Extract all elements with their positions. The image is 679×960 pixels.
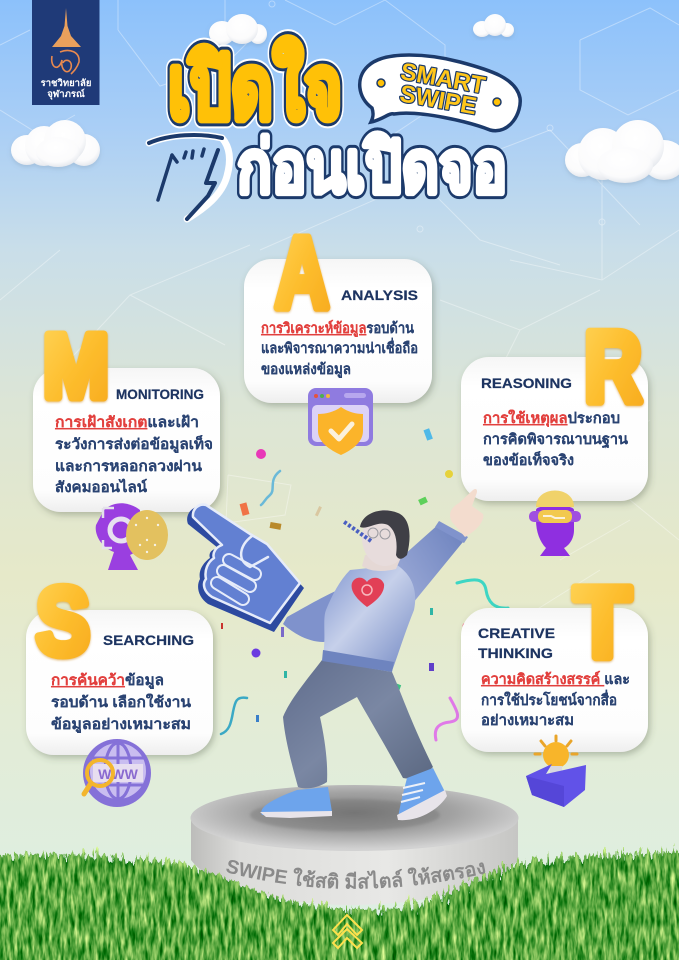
description: สังคมออนไลน์ [55,478,147,496]
cloud top middle [209,14,267,45]
description: ระวังการส่งต่อข้อมูลเท็จ [55,434,213,453]
bubble dots [377,79,501,106]
letter S: S [36,568,90,675]
description [483,409,628,469]
description: ของข้อเท็จจริง [483,450,574,469]
icon: shield window [308,388,373,455]
heading: CREATIVE [478,625,555,641]
sweater hem [322,650,394,672]
title [149,37,520,219]
card: analysis [244,217,432,403]
description: การใช้ประโยชน์จากสื่อ [481,689,617,709]
left arm [283,590,345,642]
icon: heart [352,578,384,607]
cloud top right [473,14,514,37]
torso [322,565,415,671]
shoes [261,768,445,818]
heading [478,625,555,661]
confetti and ribbons [221,428,508,740]
description [51,672,191,733]
heading: REASONING [481,375,572,391]
description: การเฝ้าสังเกต และเฝ้า [55,414,199,431]
description: การค้นคว้า ข้อมูล [51,672,164,689]
title line 1: เปิดใจ [168,37,342,137]
heading: MONITORING [116,386,204,402]
icon: double chevron [333,915,362,948]
character [187,489,483,831]
description: ของแหล่งข้อมูล [261,361,351,378]
letter T: T [574,567,631,679]
letter M: M [43,317,109,417]
description: อย่างเหมาะสม [481,713,574,729]
logo [32,0,100,105]
grass [0,849,679,960]
title line 1: เปิดใจ [168,37,342,137]
hand [450,489,483,537]
description: รอบด้าน เลือกใช้งาน [51,693,191,711]
description [55,414,213,496]
title line 2: ก่อนเปิดจอ [237,128,507,208]
network pattern [0,0,679,620]
icon: palace spire [52,8,81,47]
icon: www globe [83,739,151,807]
card: monitoring [33,317,220,512]
trousers [283,660,433,788]
description: ความคิดสร้างสรรค์ และ [481,670,630,688]
cloud right [565,120,679,183]
title line 1: เปิดใจ [168,37,342,137]
logo text: จุฬาภรณ์ [47,88,85,100]
heading: ANALYSIS [341,287,418,303]
foam hand [187,505,304,632]
icon: www globe: WWW [98,766,139,782]
hair [360,510,410,559]
neck and head [343,510,410,571]
icon: lightbulb box [526,736,586,807]
glasses [368,528,390,539]
description: ข้อมูลอย่างเหมาะสม [51,716,191,733]
cloud left [11,120,100,167]
description: และพิจารณาความน่าเชื่อถือ [261,337,418,357]
bubble text [395,58,488,121]
icon: royal monogram [52,50,79,74]
icon: face scan [96,503,168,570]
heading: THINKING [478,645,553,661]
bubble text: SWIPE [398,80,479,120]
bubble text: SMART [399,58,488,100]
shadow under character [250,799,440,831]
heading: SEARCHING [103,632,194,648]
card: creative thinking [461,567,648,752]
description: การวิเคราะห์ข้อมูลรอบด้าน [261,319,414,337]
logo text: ราชวิทยาลัย [41,78,91,89]
title line 2: ก่อนเปิดจอ [237,128,507,208]
description: การคิดพิจารณาบนฐาน [483,431,628,449]
icon: vr brain head [529,490,581,556]
party horn [343,521,371,541]
podium caption: SWIPE ใช้สติ มีสไตล์ ให้สตรอง [226,860,486,889]
podium [190,785,518,905]
clouds [11,14,679,183]
description [481,670,630,729]
description: และการหลอกลวงผ่าน [55,459,202,475]
description: การใช้เหตุผลประกอบ [483,409,620,427]
card: reasoning [461,311,648,501]
letter A: A [275,217,329,329]
letter R: R [584,311,642,423]
speech bubble [360,55,520,131]
icon: hand swipe [149,135,229,219]
description [261,319,418,378]
card: searching [26,568,213,755]
logo text [41,78,91,100]
sleeve cuff [435,521,468,543]
right arm [393,523,467,640]
